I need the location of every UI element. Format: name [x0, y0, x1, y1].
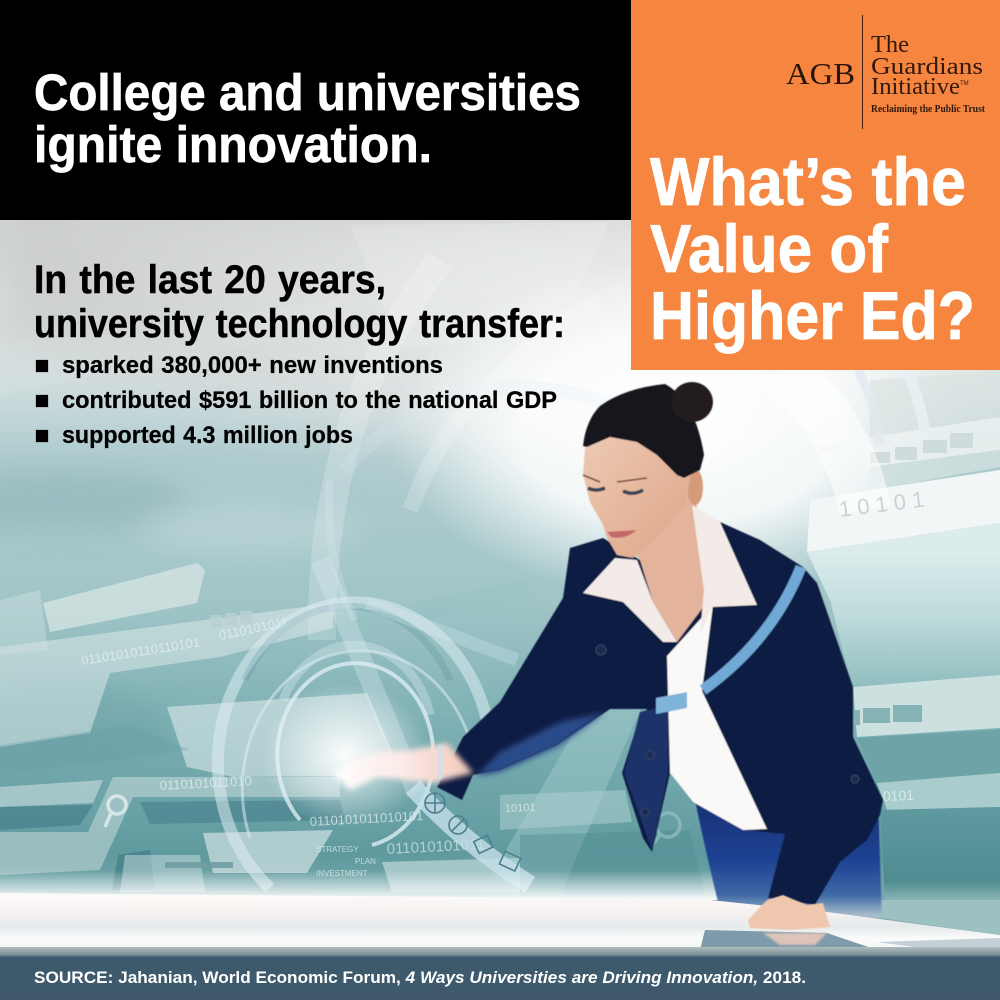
small blocks	[165, 611, 252, 868]
Guardians Initiative wordmark: Guardians	[871, 54, 983, 80]
left collar	[583, 558, 677, 642]
shirt	[667, 605, 767, 830]
neck	[630, 490, 707, 642]
orange title: Value of	[650, 211, 888, 287]
binary code strings: STRATEGY	[316, 845, 359, 854]
heading	[34, 64, 581, 173]
subheading	[34, 258, 565, 346]
trousers	[693, 790, 882, 918]
binary code strings	[80, 487, 926, 878]
eyes, brows and lips	[583, 475, 647, 538]
source line: SOURCE: Jahanian, World Economic Forum, 4 Ways Universities are Driving Innovation, 2018.	[34, 969, 806, 987]
faint upper interface shapes	[0, 222, 610, 655]
right collar	[692, 505, 757, 634]
sleeve highlight	[476, 712, 605, 776]
Guardians Initiative wordmark: The	[871, 32, 909, 58]
upper haze	[0, 220, 1000, 460]
Guardians Initiative wordmark: Initiative	[871, 74, 960, 100]
binary code strings: 01101010110110101	[80, 634, 201, 668]
wrist band	[438, 745, 443, 779]
hair	[583, 384, 704, 478]
resting hand	[748, 895, 830, 930]
footer band	[0, 947, 1000, 1000]
icon band: globe, no-sign, house, chart	[425, 793, 521, 871]
binary code strings: 10101	[505, 802, 536, 815]
Guardians Initiative wordmark: Reclaiming the Public Trust	[871, 104, 986, 115]
AGB wordmark: AGB	[786, 56, 855, 91]
bullet list: contributed $591 billion to the national GDP	[62, 387, 557, 414]
orange title	[650, 144, 975, 354]
binary code strings: 0110101011	[218, 614, 289, 643]
interface panels	[0, 563, 705, 895]
face	[583, 432, 692, 558]
orange title: What’s the	[650, 144, 966, 220]
fade above desk	[0, 870, 880, 900]
reaching hand	[333, 743, 473, 790]
orange panel	[631, 0, 1000, 370]
hand glow	[260, 683, 430, 827]
blue holographic arc	[703, 567, 801, 690]
binary code strings: 0110101011010101	[309, 808, 424, 829]
jacket buttons	[596, 645, 859, 816]
ear	[687, 469, 703, 505]
black heading panel	[0, 0, 631, 220]
blue arc foot	[656, 692, 687, 714]
background photo scene	[0, 220, 1000, 945]
binary code strings: 1 0 1 0 1	[838, 487, 926, 522]
binary code strings: 011010101011	[386, 836, 485, 858]
bullet list	[36, 352, 557, 449]
binary code strings: 0101	[883, 787, 914, 804]
logo	[786, 15, 986, 129]
jacket	[437, 522, 883, 905]
holographic rings	[218, 388, 620, 888]
hair bun	[671, 382, 713, 422]
white desk surface	[0, 893, 1000, 950]
binary code strings: INVESTMENT	[316, 869, 368, 878]
light reflection strip	[877, 938, 1000, 950]
heading: ignite innovation.	[34, 116, 432, 173]
cloud patches	[0, 470, 360, 775]
heading: College and universities	[34, 64, 581, 121]
binary code strings: PLAN	[355, 857, 376, 866]
bullet list: sparked 380,000+ new inventions	[62, 352, 443, 379]
Guardians Initiative wordmark: TM	[960, 81, 969, 87]
Guardians Initiative wordmark	[871, 32, 986, 115]
glow behind figure	[390, 260, 970, 600]
subheading: university technology transfer:	[34, 302, 565, 346]
bullet list: supported 4.3 million jobs	[62, 422, 353, 449]
jacket lower panel highlight	[624, 705, 668, 850]
desk reflection panel	[700, 930, 877, 950]
magnifier icons	[105, 796, 680, 847]
hand reflection	[763, 933, 827, 945]
right upper interface panels	[785, 370, 1000, 935]
woman at touch screen	[333, 382, 883, 918]
subheading: In the last 20 years,	[34, 258, 386, 302]
binary code strings: 0110101011010	[159, 773, 252, 793]
faint ring sweeps upper	[322, 260, 600, 640]
